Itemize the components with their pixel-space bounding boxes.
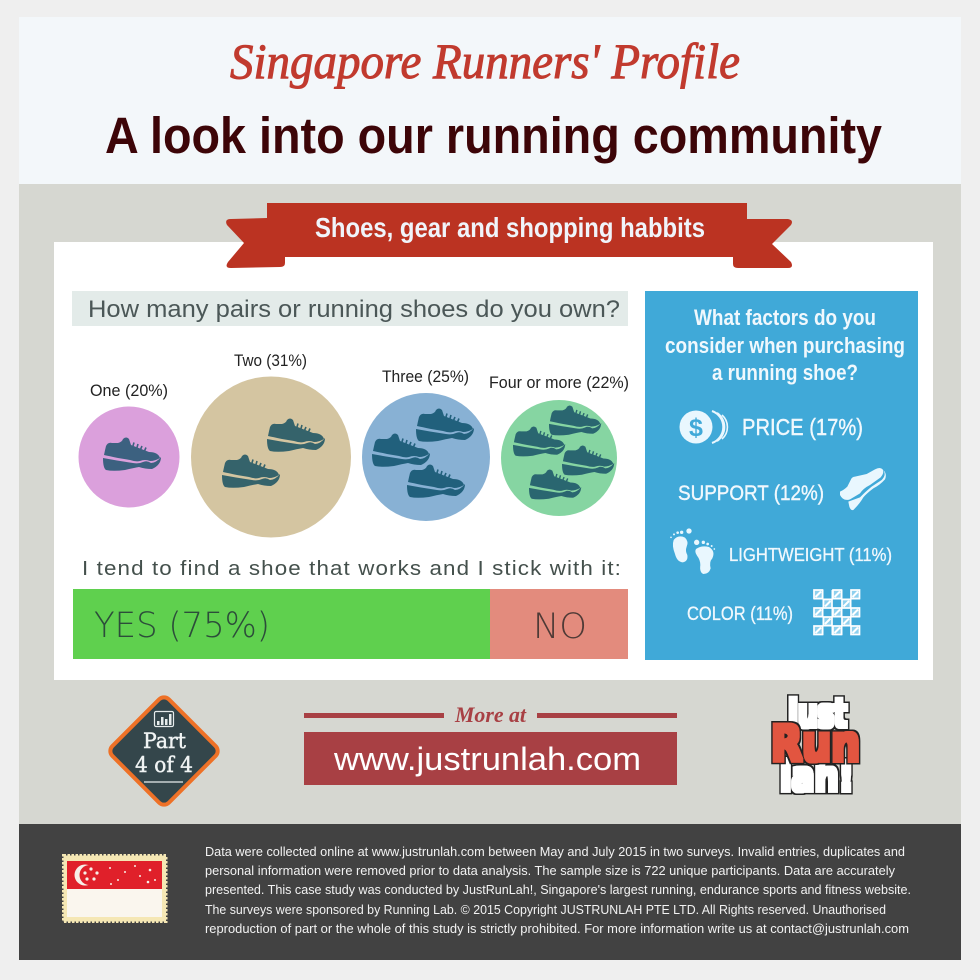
call to action [304, 702, 677, 785]
logo: JustRunLah: lah! [780, 752, 854, 801]
factor: support [678, 468, 886, 510]
disclaimer text: reproduction of part or the whole of this study is strictly prohibited. For more information write us at contact@justrunlah.com [205, 922, 909, 936]
bubble: four or more pairs: Four or more (22%) [489, 373, 629, 392]
bubble: one pair: One (20%) [90, 381, 168, 400]
subtitle: A look into our running community [105, 107, 883, 164]
factor: price [680, 410, 863, 444]
ribbon text: Shoes, gear and shopping habbits [315, 212, 705, 243]
panel question [665, 305, 905, 385]
icon: bar chart [154, 712, 174, 726]
panel: shoe ownership [72, 291, 629, 659]
bubble: one pair [78, 381, 180, 508]
disclaimer text: personal information were removed prior to data analysis. The sample size is 722 unique participants. Data are accurately [205, 864, 896, 878]
badge: part 4 of 4 [107, 694, 221, 808]
icon: Singapore flag stamp [64, 856, 166, 922]
factor: color [687, 590, 860, 635]
bubble: three pairs: Three (25%) [382, 367, 469, 386]
factor: color: COLOR (11%) [687, 604, 793, 625]
no bar: NO [533, 607, 587, 647]
disclaimer text: The surveys were sponsored by Running Lab. © 2015 Copyright JUSTRUNLAH PTE LTD. All Rights reserved. Unauthorised [205, 903, 886, 917]
logo: JustRunLah: Run [771, 715, 860, 773]
panel question: What factors do you [694, 305, 876, 330]
question heading [72, 291, 628, 326]
factor: support: SUPPORT (12%) [678, 482, 824, 505]
header panel [19, 17, 961, 184]
panel question: consider when purchasing [665, 333, 905, 358]
loyalty statement: I tend to find a shoe that works and I stick with it: [82, 558, 622, 580]
no bar [490, 589, 628, 659]
url button [304, 732, 677, 785]
grey content background [19, 184, 961, 824]
logo: JustRunLah [771, 691, 860, 801]
panel: purchase factors [645, 291, 918, 660]
factor: lightweight [670, 528, 892, 574]
bubble: two pairs [191, 351, 351, 538]
logo: JustRunLah: Just [786, 691, 847, 737]
yes bar: YES (75%) [94, 606, 270, 646]
title: Singapore Runners' Profile [230, 33, 740, 89]
bubble: three pairs [362, 367, 490, 521]
factor: lightweight: LIGHTWEIGHT (11%) [729, 545, 892, 565]
question heading: How many pairs or running shoes do you own? [88, 296, 620, 323]
bubble: four or more pairs [489, 373, 629, 516]
icon: footprints [670, 528, 715, 574]
icon: running shoe [840, 468, 886, 510]
icon: coins: $ [689, 414, 703, 442]
ribbon heading [226, 203, 792, 268]
disclaimer text: Data were collected online at www.justrunlah.com between May and July 2015 in two surveys. Invalid entries, duplicates and [205, 845, 905, 859]
disclaimer text [205, 845, 911, 936]
badge: part 4 of 4: 4 of 4 [135, 753, 193, 777]
bubble: two pairs: Two (31%) [234, 351, 307, 370]
factor: price: PRICE (17%) [742, 414, 863, 440]
panel question: a running shoe? [712, 360, 858, 385]
white content panel [54, 242, 933, 680]
yes bar [73, 589, 490, 659]
footer panel [19, 824, 961, 960]
badge: part 4 of 4: Part [143, 729, 187, 753]
more at label: More at [454, 702, 527, 727]
disclaimer text: presented. This case study was conducted by JustRunLah!, Singapore's largest running, endurance sports and fitness website. [205, 883, 911, 897]
icon: colour grid [814, 590, 860, 635]
url button: www.justrunlah.com [333, 741, 641, 777]
icon: coins [680, 410, 727, 444]
